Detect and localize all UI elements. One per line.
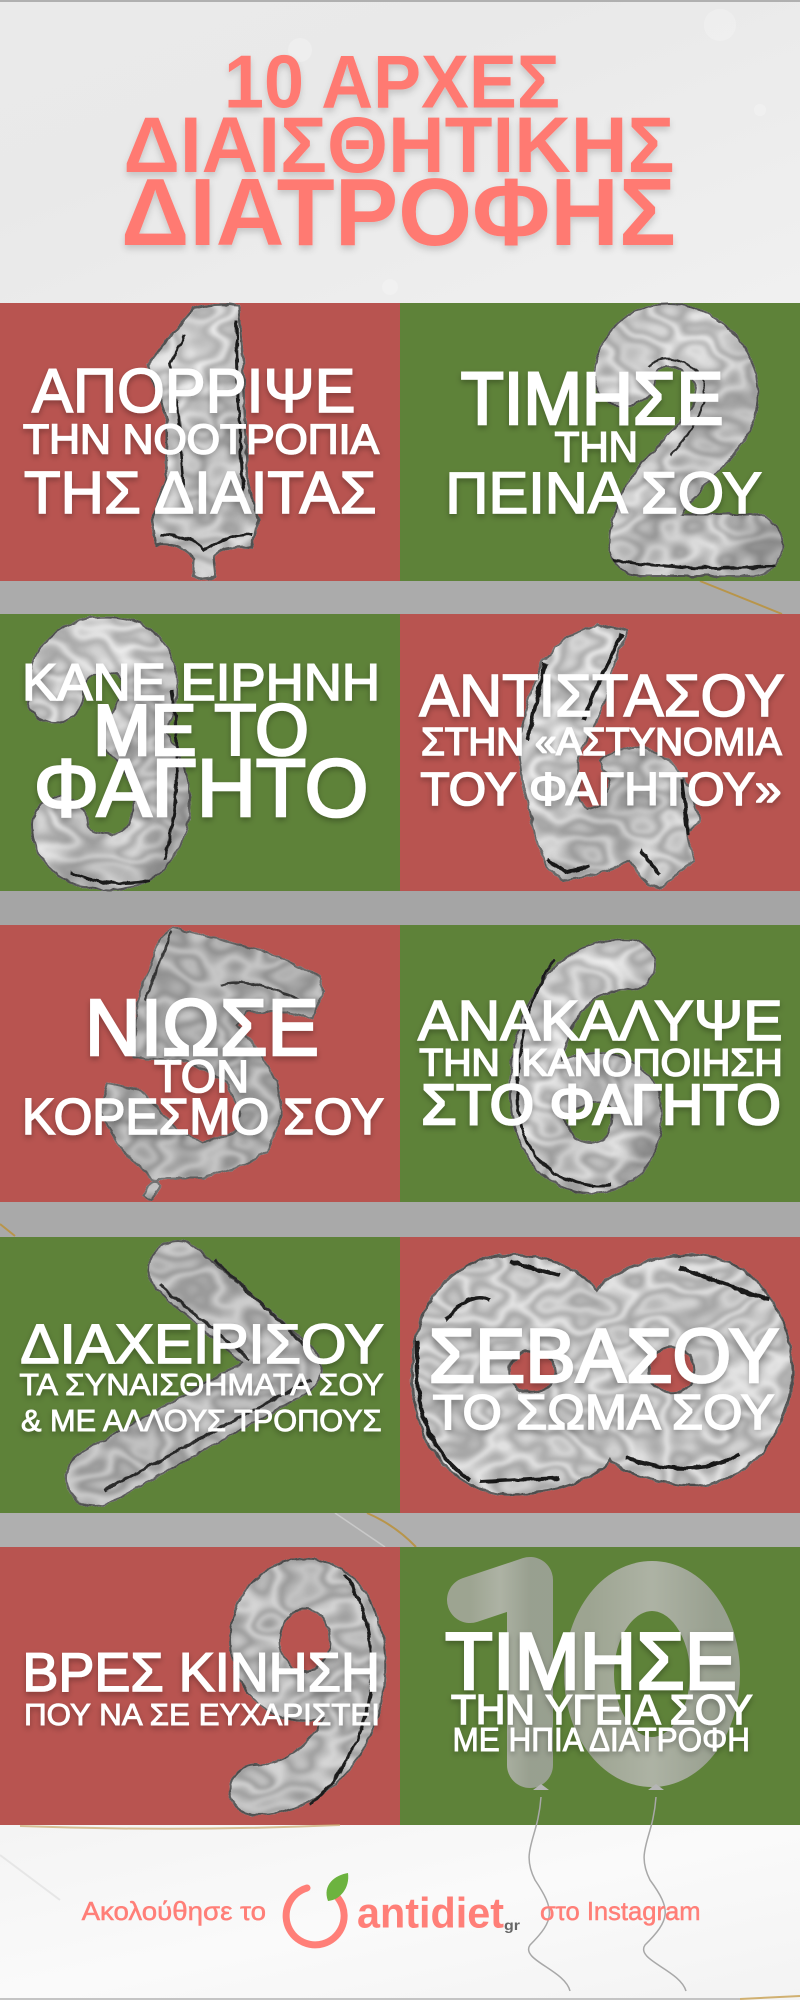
text block: ΑΠΟΡΡΙΨΕ [32,357,356,426]
text block: ΦΑΓΗΤΟ [34,743,368,834]
text block [445,1617,752,1758]
text block: ΜΕ ΤΟ [93,691,309,771]
balloon number 4 [518,624,700,889]
text block: ΤΟΝ [154,1051,249,1102]
text block: ΤΙΜΗΣΕ [445,1617,737,1707]
logo: antidiet [286,1873,521,1945]
footer background [0,1825,800,2000]
text block [22,654,380,834]
text block [429,1314,779,1440]
balloon number 9 [255,1575,372,1805]
text block: ΤΑ ΣΥΝΑΙΣΘΗΜΑΤΑ ΣΟΥ [19,1367,384,1402]
text block: ΠΟΥ ΝΑ ΣΕ ΕΥΧΑΡΙΣΤΕΙ [24,1697,380,1732]
balloon number 3 [55,645,177,884]
text block: ΣΤΟ ΦΑΓΗΤΟ [421,1073,781,1137]
text block [22,1641,380,1732]
balloon number 7 [95,1260,310,1490]
text block: ΤΗΝ ΥΓΕΙΑ ΣΟΥ [451,1686,752,1733]
text block: ΑΝΤΙΣΤΑΣΟΥ [419,663,785,729]
title: ΔΙΑΤΡΟΦΗΣ [121,159,676,266]
text block [22,983,384,1145]
panel 1: reject diet mentality [0,303,400,581]
text block: ΤΙΜΗΣΕ [461,357,724,440]
text block [418,989,783,1137]
logo: antidiet: antidiet [357,1890,504,1938]
instagram text: στο Instagram [540,1896,700,1926]
balloon number 10 [470,1580,715,1991]
text block: ΣΤΗΝ «ΑΣΤΥΝΟΜΙΑ [421,721,782,764]
text block: ΒΡΕΣ ΚΙΝΗΣΗ [22,1641,380,1703]
logo: antidiet: gr [504,1917,521,1933]
text block: ΔΙΑΧΕΙΡΙΣΟΥ [20,1312,384,1375]
text block: ΜΕ ΗΠΙΑ ΔΙΑΤΡΟΦΗ [452,1721,750,1758]
panel 4: resist the food police [400,614,800,891]
balloon number 1 [148,305,258,579]
text block: ΤΗΝ ΙΚΑΝΟΠΟΙΗΣΗ [419,1043,783,1085]
text block: ΤΟΥ ΦΑΓΗΤΟΥ» [420,763,782,815]
panel 8: respect your body [400,1237,800,1513]
balloon number 5 [100,928,323,1200]
text block: ΤΗΝ [555,424,638,472]
text block: ΣΕΒΑΣΟΥ [429,1314,779,1399]
title: 10 ΑΡΧΕΣ [224,40,560,124]
text block [445,357,762,526]
text block: ΑΝΑΚΑΛΥΨΕ [418,989,783,1053]
text block: ΠΕΙΝΑ ΣΟΥ [445,461,762,526]
title [121,40,676,266]
background: top header [0,0,800,303]
title: ΔΙΑΙΣΘΗΤΙΚΗΣ [124,100,674,189]
divider bands [0,581,800,1547]
panel 10: honour health with gentle nutrition [400,1547,800,1991]
balloon number 2 [612,335,775,568]
text block [23,357,379,526]
panel 2: honour your hunger [400,303,800,581]
text block: ΤΟ ΣΩΜΑ ΣΟΥ [433,1386,774,1440]
text block: ΚΑΝΕ ΕΙΡΗΝΗ [22,654,380,712]
panel 7: manage emotions in other ways [0,1237,400,1513]
text block: & ΜΕ ΑΛΛΟΥΣ ΤΡΟΠΟΥΣ [21,1403,382,1438]
text block [419,663,785,815]
panel 9: find movement you enjoy [0,1547,400,1825]
text block: ΤΗΝ ΝΟΟΤΡΟΠΙΑ [23,416,379,462]
panel 3: make peace with food [0,614,400,891]
text block: ΤΗΣ ΔΙΑΙΤΑΣ [24,460,376,526]
follow text: Ακολούθησε το [82,1896,266,1926]
text block: ΝΙΩΣΕ [85,983,319,1072]
balloon number 8 [412,1255,792,1494]
text block: ΚΟΡΕΣΜΟ ΣΟΥ [22,1088,384,1145]
panel 5: feel your fullness [0,925,400,1202]
footer call to action [82,1873,701,1945]
panel 6: discover satisfaction in food [400,925,800,1202]
balloon number 6 [518,960,637,1186]
text block [19,1312,384,1438]
